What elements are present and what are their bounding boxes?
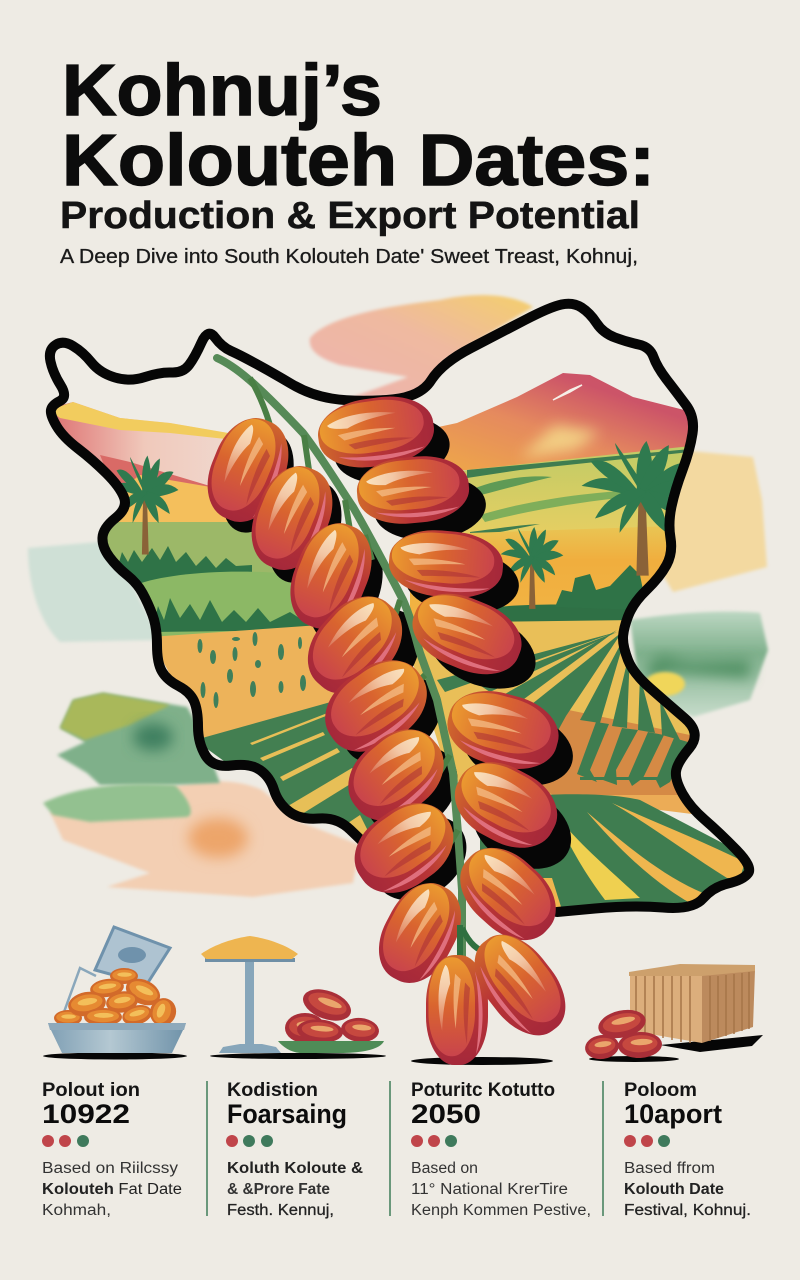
watercolor background washes	[28, 295, 768, 897]
stat block: production: Based on Riilcssy	[42, 1160, 178, 1177]
map outline	[50, 304, 749, 912]
icon: wooden crate with dates	[583, 964, 763, 1062]
stem	[217, 358, 462, 960]
stat block: potential	[411, 1080, 591, 1219]
date shadows	[208, 409, 585, 918]
tagline: A Deep Dive into South Kolouteh Date' Sweet Treast, Kohnuj,	[60, 246, 638, 268]
title: Kolouteh Dates:	[62, 121, 655, 201]
rating dots	[42, 1135, 89, 1147]
stat block: potential: Kenph Kommen Pestive,	[411, 1202, 591, 1219]
rating dots	[411, 1135, 457, 1147]
left sky streak	[56, 402, 223, 486]
stat block: export: 10aport	[624, 1099, 722, 1129]
stat block: production: Kolouteh Fat Date	[42, 1181, 182, 1198]
date cluster	[195, 358, 585, 1065]
product card behind bowl	[95, 927, 170, 984]
palm trees	[112, 456, 178, 554]
bottom dates	[426, 955, 488, 1065]
stat block: potential: 11° National KrerTire	[411, 1181, 568, 1198]
stat block: export: Based ffrom	[624, 1160, 715, 1177]
stat block: export: Festival, Kohnuj.	[624, 1202, 751, 1219]
right green yellow band	[462, 446, 685, 534]
left green meadow	[108, 522, 276, 573]
icon: bowl of dates	[43, 927, 187, 1060]
stat block: forecasting: Kodistion	[227, 1080, 318, 1101]
stat block: forecasting: Koluth Koloute &	[227, 1160, 363, 1177]
left orange dusk	[118, 475, 228, 522]
dates right column	[314, 390, 438, 474]
stat block: production: 10922	[42, 1099, 130, 1129]
rating dots	[624, 1135, 670, 1147]
stat block: potential: Based on	[411, 1160, 478, 1177]
ground shadow	[411, 1057, 553, 1065]
lower right striped field	[480, 794, 755, 912]
stat block: forecasting	[226, 1080, 363, 1219]
dark ridge	[496, 604, 626, 622]
second green hill	[142, 572, 298, 636]
map of Kohnuj with landscape	[30, 290, 770, 930]
stat block: production: Polout ion	[42, 1080, 140, 1101]
striped fan field	[414, 620, 690, 795]
bottom left striped field	[204, 702, 374, 830]
stat block: production	[42, 1080, 182, 1219]
stat block: production: Kohmah,	[42, 1202, 111, 1219]
stat block: forecasting: & &Prore Fate	[227, 1181, 330, 1198]
mountain	[439, 373, 688, 470]
left yellow field	[162, 626, 334, 738]
subtitle: Production & Export Potential	[60, 195, 640, 237]
stat block: forecasting: Festh. Kennuj,	[227, 1202, 334, 1219]
hanging stems	[460, 925, 486, 962]
title: Kohnuj’s	[62, 51, 382, 131]
stat block: export	[624, 1080, 751, 1219]
stat block: export: Poloom	[624, 1080, 697, 1101]
stat block: potential: Poturitc Kotutto	[411, 1080, 555, 1101]
dividers	[207, 1081, 603, 1216]
icon: stand and plate of dates	[201, 936, 386, 1059]
stat block: forecasting: Foarsaing	[227, 1099, 347, 1129]
right orange band	[410, 526, 666, 617]
title	[62, 51, 655, 201]
rating dots	[226, 1135, 273, 1147]
stat block: export: Kolouth Date	[624, 1181, 724, 1198]
stat block: potential: 2050	[411, 1099, 481, 1129]
dates left column	[195, 407, 301, 533]
